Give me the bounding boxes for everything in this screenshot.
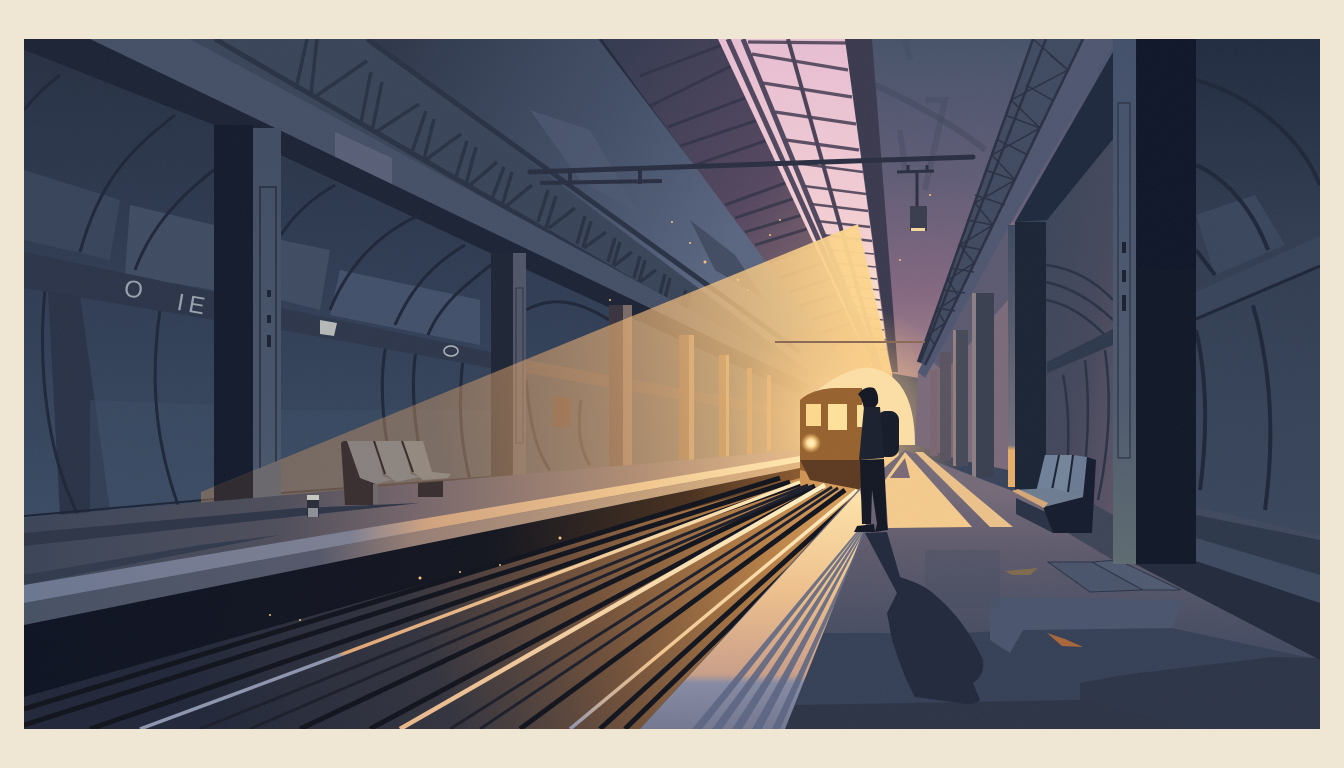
lit base of the first pillar <box>214 460 281 502</box>
right platform floor <box>640 450 1320 729</box>
right wall dado and kerb bands <box>1068 515 1320 660</box>
left platform <box>24 450 800 625</box>
right wall: middle bay <box>1046 139 1113 515</box>
lamp rail <box>530 157 973 231</box>
tactile paving stripes <box>692 530 867 729</box>
right wall: far tunnel section <box>915 222 1015 470</box>
right pillars far <box>930 222 1046 490</box>
right bench <box>1012 455 1096 533</box>
right wall: near bay <box>1196 39 1320 535</box>
far tunnel arch <box>816 368 915 445</box>
shoes <box>854 523 888 532</box>
coffee cup <box>307 495 319 517</box>
left girder <box>24 39 724 357</box>
rails <box>24 478 860 729</box>
skylight <box>718 39 898 372</box>
left pillars <box>214 125 771 520</box>
ceiling: left slate vault <box>372 39 766 306</box>
wall sign fragment two: IE <box>175 289 212 321</box>
tunnel glow <box>756 316 956 474</box>
traveller's shadow <box>865 532 983 704</box>
lit floor strips <box>640 452 1013 729</box>
track bed <box>24 470 862 729</box>
ceiling: right vault <box>845 39 1120 380</box>
wall sign fragments: O <box>122 275 145 305</box>
right girder <box>918 39 1117 378</box>
left truss <box>214 39 784 340</box>
ceiling: slatted purple panel <box>602 39 814 262</box>
light beam <box>201 224 900 522</box>
legs <box>860 459 887 524</box>
right truss <box>918 39 1083 365</box>
front right pillar <box>1113 39 1196 564</box>
platform wall shadow <box>24 468 800 697</box>
far crossbar <box>775 341 925 343</box>
head and cap <box>858 387 878 409</box>
torso <box>859 407 884 460</box>
left wall <box>24 50 609 518</box>
dust motes <box>269 194 931 621</box>
traveller <box>854 387 899 532</box>
fallen leaves <box>1005 568 1083 647</box>
train <box>800 388 863 490</box>
left bench <box>341 441 451 505</box>
backpack <box>877 411 899 457</box>
